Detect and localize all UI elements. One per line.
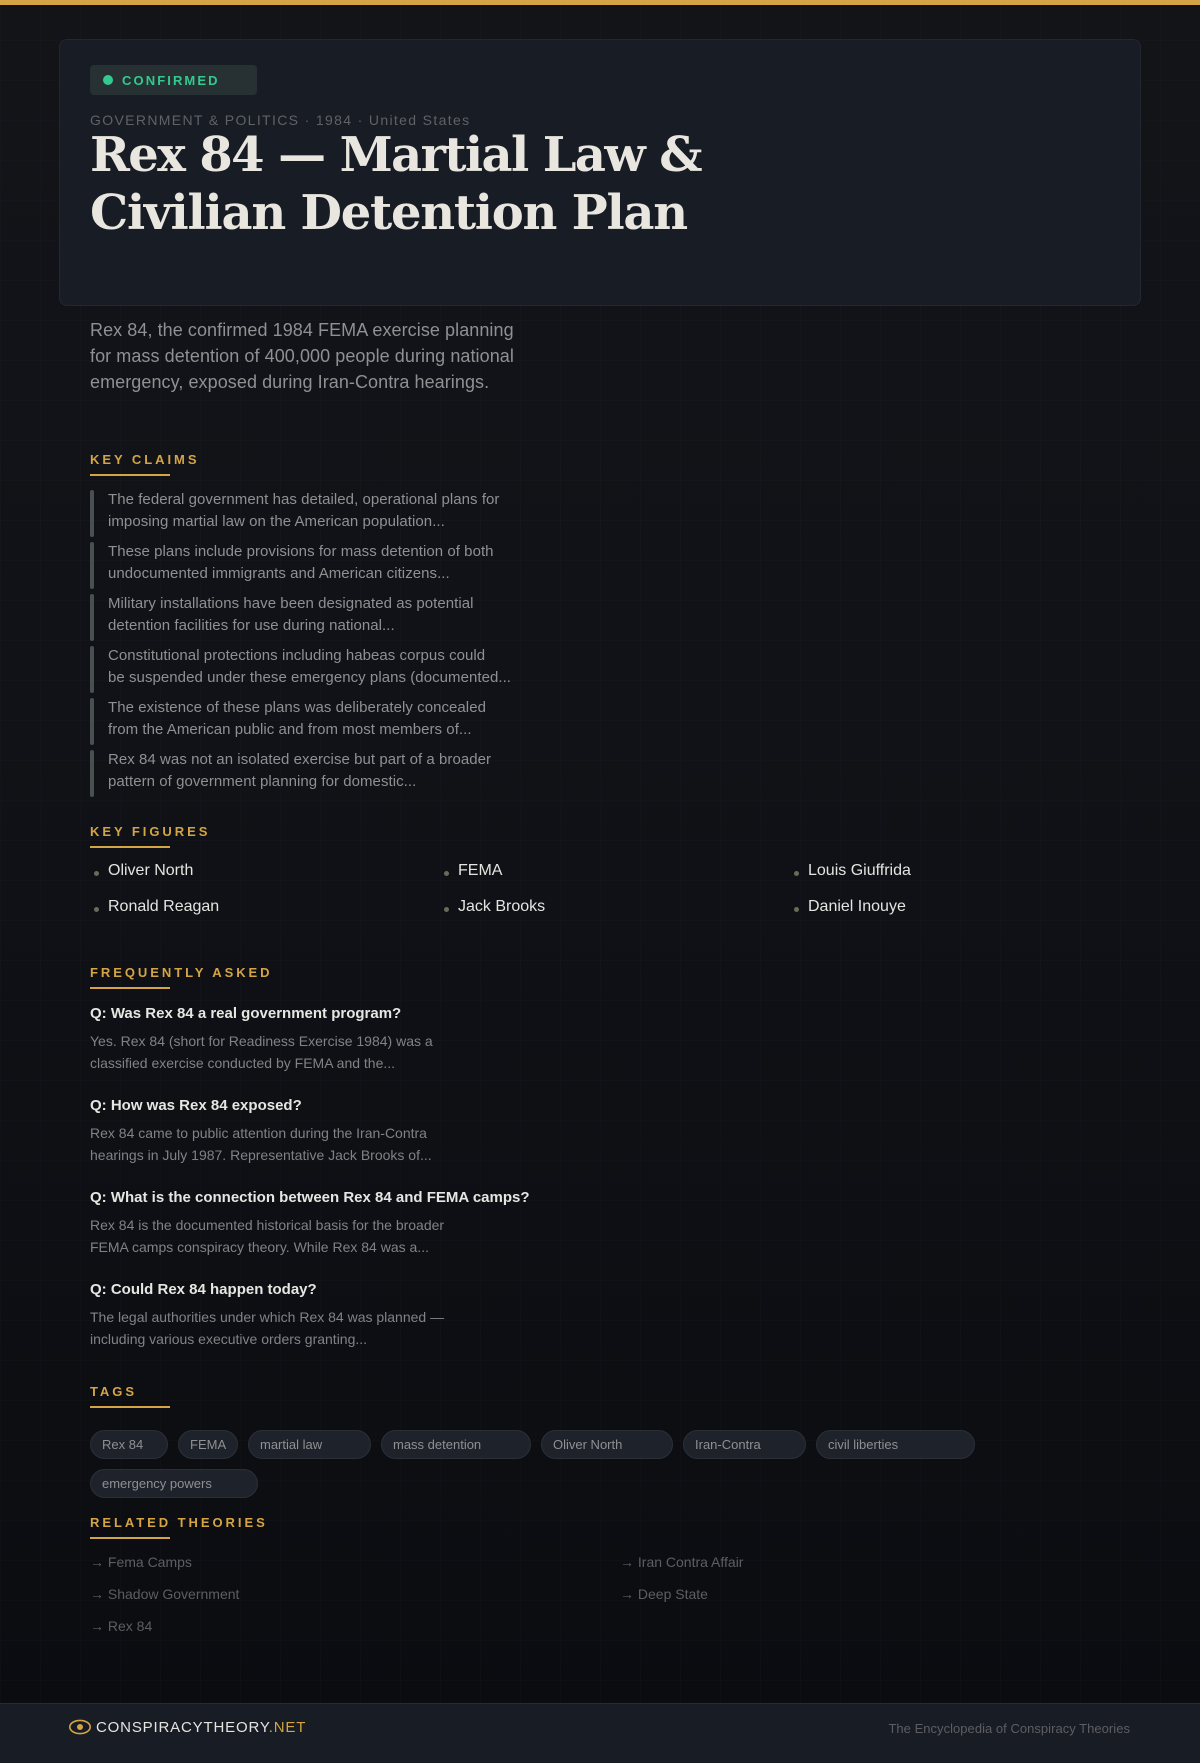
claim 6	[90, 750, 491, 797]
figure: Louis Giuffrida: Louis Giuffrida	[808, 862, 911, 879]
claim 2: undocumented immigrants and American citizens...	[108, 565, 450, 582]
figure: Ronald Reagan: Ronald Reagan	[108, 898, 219, 915]
figure: Jack Brooks: Jack Brooks	[458, 898, 545, 915]
tag: Iran-Contra: Iran-Contra	[695, 1437, 761, 1452]
claim 5: from the American public and from most members of...	[108, 721, 472, 738]
related theories links	[90, 1554, 744, 1634]
FAQ 4: including various executive orders granting...	[90, 1331, 367, 1347]
tag: Rex 84	[90, 1430, 168, 1459]
title: Civilian Detention Plan	[90, 184, 687, 240]
claim 1: The federal government has detailed, operational plans for	[108, 491, 499, 508]
FAQ 3	[90, 1189, 530, 1255]
tag: emergency powers: emergency powers	[102, 1476, 212, 1490]
footer brand wordmark: CONSPIRACYTHEORY.NET	[96, 1719, 306, 1736]
tag: civil liberties	[816, 1430, 975, 1459]
claim 2: These plans include provisions for mass detention of both	[108, 543, 494, 560]
panel: hero header	[59, 39, 1141, 306]
status badge: confirmed	[90, 65, 257, 95]
tag: FEMA	[178, 1430, 238, 1459]
tag: FEMA: FEMA	[190, 1437, 226, 1452]
heading: related theories: RELATED THEORIES	[90, 1514, 268, 1530]
FAQ 3: Q: What is the connection between Rex 84 and FEMA camps?	[90, 1189, 530, 1206]
claim 3	[90, 594, 474, 641]
title: Rex 84 — Martial Law &	[90, 126, 701, 182]
summary paragraph: Rex 84, the confirmed 1984 FEMA exercise planning	[90, 320, 514, 340]
FAQ 3: FEMA camps conspiracy theory. While Rex 84 was a...	[90, 1239, 429, 1255]
heading: tags: TAGS	[90, 1384, 137, 1398]
FAQ 4	[90, 1281, 444, 1347]
FAQ 2: Rex 84 came to public attention during the Iran-Contra	[90, 1125, 427, 1141]
claim 2	[90, 542, 494, 589]
claim 1: imposing martial law on the American population...	[108, 513, 445, 530]
status badge: confirmed: CONFIRMED	[122, 73, 220, 88]
FAQ 1: Q: Was Rex 84 a real government program?	[90, 1005, 401, 1022]
FAQ list	[90, 1005, 530, 1347]
claim 3: detention facilities for use during national...	[108, 617, 395, 634]
tag: mass detention: mass detention	[393, 1437, 481, 1452]
summary paragraph: for mass detention of 400,000 people during national	[90, 346, 514, 366]
tag: Iran-Contra	[683, 1430, 806, 1459]
link: Rex 84: → Rex 84	[90, 1618, 152, 1634]
key claims list	[90, 490, 511, 797]
tag: emergency powers	[90, 1468, 258, 1498]
heading: frequently asked: FREQUENTLY ASKED	[90, 964, 273, 980]
tag: Oliver North	[541, 1430, 673, 1459]
claim 4	[90, 646, 511, 693]
FAQ 2: Q: How was Rex 84 exposed?	[90, 1097, 302, 1114]
top accent bar	[0, 0, 1200, 5]
claim 5	[90, 698, 486, 745]
FAQ 1	[90, 1005, 433, 1071]
key figures grid	[94, 862, 911, 915]
FAQ 4: Q: Could Rex 84 happen today?	[90, 1281, 317, 1298]
FAQ 2: hearings in July 1987. Representative Jack Brooks of...	[90, 1147, 432, 1163]
claim 4: be suspended under these emergency plans (documented...	[108, 669, 511, 686]
figure: Oliver North: Oliver North	[108, 862, 193, 879]
link: Fema Camps: → Fema Camps	[90, 1554, 192, 1570]
FAQ 2	[90, 1097, 432, 1163]
heading: key claims: KEY CLAIMS	[90, 452, 199, 466]
link: Shadow Government: → Shadow Government	[90, 1586, 239, 1602]
heading: key figures: KEY FIGURES	[90, 824, 210, 838]
claim 5: The existence of these plans was deliberately concealed	[108, 699, 486, 716]
claim 4: Constitutional protections including habeas corpus could	[108, 647, 485, 664]
link: Iran Contra Affair: → Iran Contra Affair	[620, 1554, 743, 1570]
FAQ 3: Rex 84 is the documented historical basis for the broader	[90, 1217, 444, 1233]
claim 3: Military installations have been designated as potential	[108, 595, 474, 612]
tag: civil liberties: civil liberties	[828, 1437, 898, 1452]
tag: martial law: martial law	[260, 1437, 322, 1452]
claim 1	[90, 490, 500, 537]
link: Deep State: → Deep State	[620, 1586, 708, 1602]
claim 6: Rex 84 was not an isolated exercise but part of a broader	[108, 751, 491, 768]
FAQ 4: The legal authorities under which Rex 84 was planned —	[90, 1309, 444, 1325]
summary paragraph	[90, 320, 514, 392]
category line: GOVERNMENT & POLITICS · 1984 · United States	[90, 112, 470, 128]
tags group	[90, 1430, 975, 1498]
FAQ 1: classified exercise conducted by FEMA and the...	[90, 1055, 395, 1071]
footer bar	[0, 1703, 1200, 1763]
tag: Rex 84: Rex 84	[102, 1437, 143, 1452]
footer tagline: The Encyclopedia of Conspiracy Theories	[888, 1721, 1130, 1736]
icon: eye logo	[69, 1720, 91, 1734]
title	[90, 126, 702, 240]
figure: Daniel Inouye: Daniel Inouye	[808, 898, 906, 915]
figure: FEMA: FEMA	[458, 862, 502, 879]
tag: mass detention	[381, 1430, 531, 1459]
tag: Oliver North: Oliver North	[553, 1437, 622, 1452]
claim 6: pattern of government planning for domestic...	[108, 773, 416, 790]
summary paragraph: emergency, exposed during Iran-Contra hearings.	[90, 372, 489, 392]
FAQ 1: Yes. Rex 84 (short for Readiness Exercise 1984) was a	[90, 1033, 433, 1049]
tag: martial law	[248, 1430, 371, 1459]
